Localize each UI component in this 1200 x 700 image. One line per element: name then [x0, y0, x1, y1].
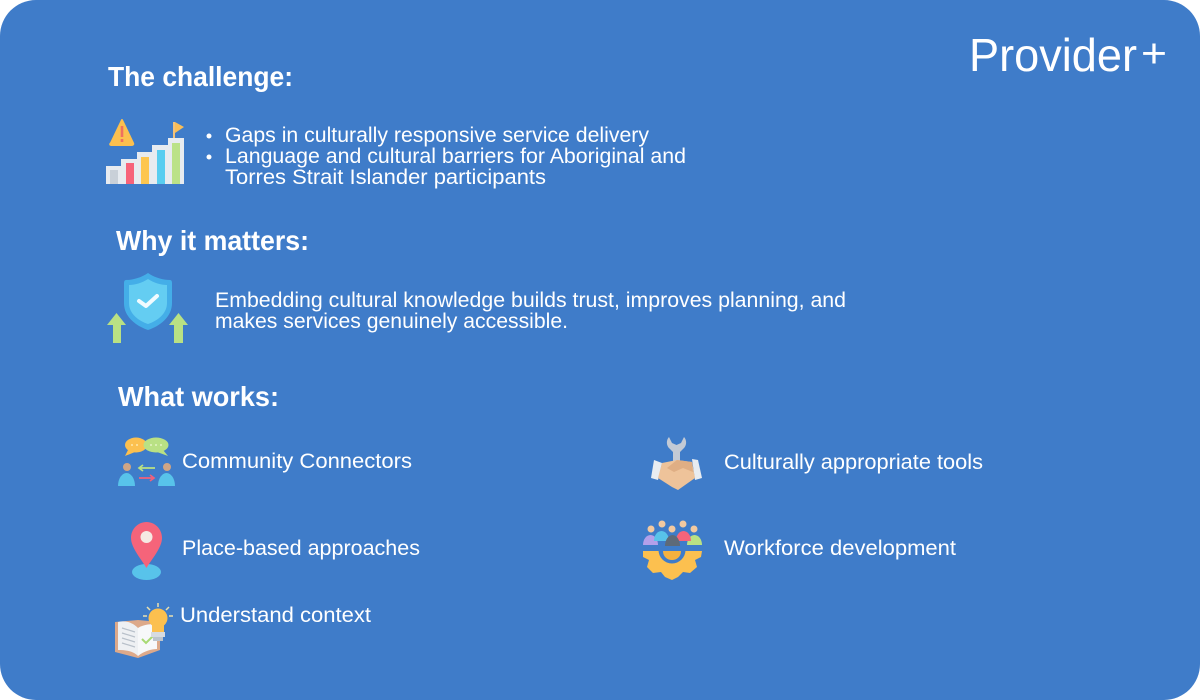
- challenge bullet list: [206, 123, 686, 189]
- label: Community Connectors: Community Connectors: [182, 449, 412, 473]
- icon: community connectors: [118, 438, 175, 486]
- logo: Provider+: Provider: [969, 29, 1137, 81]
- label: Culturally appropriate tools: Culturally appropriate tools: [724, 450, 983, 474]
- heading: The challenge: The challenge:: [108, 61, 293, 92]
- why it matters text: [215, 288, 846, 333]
- label: Place-based approaches: Place-based approaches: [182, 536, 420, 560]
- label: Understand context: Understand context: [180, 603, 371, 627]
- icon: team over gear: [643, 520, 702, 580]
- heading: Why it matters: Why it matters:: [116, 225, 309, 256]
- challenge bullet list: Language and cultural barriers for Aboriginal and: [225, 144, 686, 168]
- icon: handshake with wrench: [651, 437, 702, 490]
- logo: Provider+: +: [1141, 30, 1167, 76]
- challenge bullet list: Torres Strait Islander participants: [225, 165, 546, 189]
- icon: shield with check and up arrows: [107, 273, 188, 343]
- icon: location pin: [131, 522, 162, 580]
- label: Workforce development: Workforce development: [724, 536, 956, 560]
- challenge bullet list: Gaps in culturally responsive service delivery: [225, 123, 649, 147]
- heading: What works: What works:: [118, 381, 279, 412]
- icon: open book with light bulb: [115, 603, 173, 658]
- icon: warning and rising bar chart with flag: [106, 120, 184, 184]
- why it matters text: Embedding cultural knowledge builds trust, improves planning, and: [215, 288, 846, 312]
- why it matters text: makes services genuinely accessible.: [215, 309, 568, 333]
